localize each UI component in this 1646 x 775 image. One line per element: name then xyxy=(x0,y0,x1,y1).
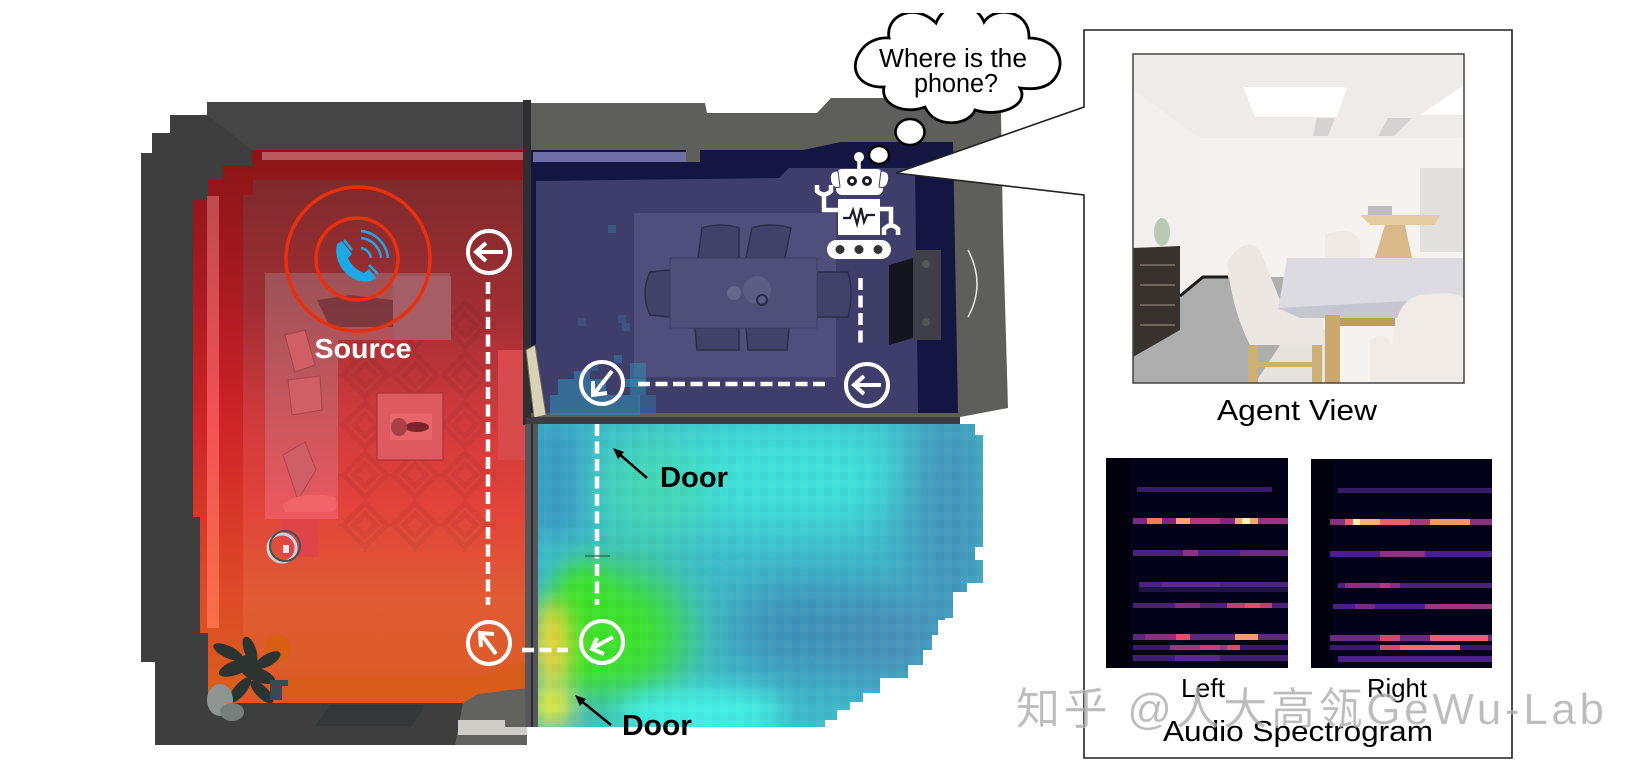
sofa xyxy=(265,273,451,557)
icon: robot agent xyxy=(817,152,898,259)
door callout lower: Door xyxy=(622,710,692,742)
cabinet xyxy=(889,250,941,345)
speech tail and panel: agent observations xyxy=(896,30,1512,758)
top light strip xyxy=(533,152,686,162)
arrow: waypoint up-left xyxy=(468,622,510,664)
centre wall xyxy=(523,100,531,425)
path: dashed route xyxy=(488,278,860,650)
right spectrogram xyxy=(1311,459,1492,668)
agent view frame xyxy=(1133,54,1464,383)
bright left baseboard xyxy=(207,196,219,628)
cloud text: phone? xyxy=(914,70,998,98)
arrow: waypoint left xyxy=(846,364,888,406)
right room dark blue field xyxy=(531,142,958,413)
dining set xyxy=(645,225,851,350)
floor plan xyxy=(141,98,1008,745)
wall arc xyxy=(968,250,977,317)
cloud text: Where is the xyxy=(879,45,1027,73)
coffee table xyxy=(377,393,443,460)
label: audio spectrogram: Audio Spectrogram xyxy=(1163,716,1433,748)
left room red sound field xyxy=(193,150,525,703)
door callout upper: Door xyxy=(660,462,728,494)
heat leak squares xyxy=(550,225,656,415)
bottom orange step xyxy=(283,662,525,703)
arrow: waypoint down-left xyxy=(581,621,623,663)
watermark: 知乎 @人大高瓴GeWu-Lab xyxy=(1016,685,1604,734)
arrow: waypoint left xyxy=(468,231,510,273)
thought bubbles xyxy=(869,119,924,164)
side table by door xyxy=(498,350,525,460)
label: left channel: Left xyxy=(1181,673,1226,703)
door callout upper xyxy=(613,448,728,494)
door leaf xyxy=(526,345,546,418)
arrow: waypoint down-left xyxy=(581,362,623,404)
right room floor xyxy=(536,168,918,413)
cloud text xyxy=(879,45,1027,98)
agent view image xyxy=(1133,54,1464,383)
floor lamp xyxy=(268,531,300,562)
right room walls xyxy=(526,98,1008,417)
bottom wall grey block xyxy=(455,688,527,745)
left room floor xyxy=(243,180,525,703)
label: agent view: Agent View xyxy=(1217,395,1378,427)
label: source: Source xyxy=(314,333,412,364)
bottom wall rug xyxy=(315,705,425,726)
thought cloud xyxy=(855,6,1060,123)
waypoint arrows xyxy=(468,231,888,664)
patterned rug xyxy=(338,300,496,552)
icon: ringing phone xyxy=(336,231,388,282)
sound source circles xyxy=(286,187,430,331)
left spectrogram xyxy=(1106,458,1288,668)
tick on door line xyxy=(585,555,610,557)
dining rug xyxy=(634,213,836,377)
door callout lower xyxy=(575,695,692,742)
bright top baseboard xyxy=(262,152,523,160)
centre wall lower xyxy=(505,424,538,727)
left room walls xyxy=(141,102,525,745)
left room top wall panels xyxy=(207,102,525,150)
potted plant xyxy=(207,634,291,721)
label: right channel: Right xyxy=(1367,673,1428,703)
lower wall line xyxy=(526,417,960,424)
lower right room heatmap xyxy=(538,424,983,727)
